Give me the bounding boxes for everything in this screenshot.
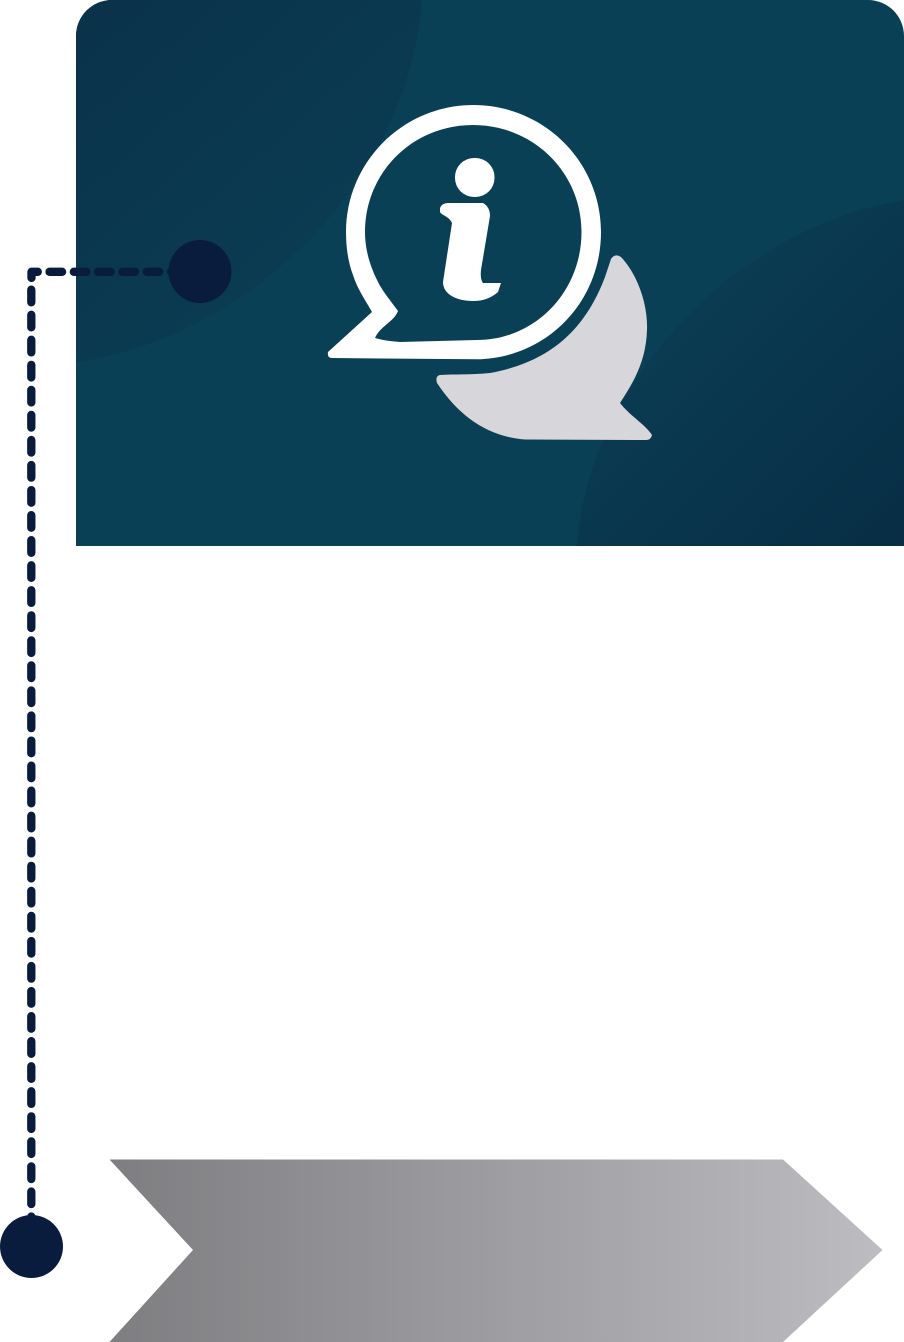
letter i dot bbox=[455, 158, 494, 197]
marker: top node bbox=[168, 240, 232, 303]
icon: white information speech bubble bbox=[328, 105, 601, 359]
marker: bottom node bbox=[0, 1215, 63, 1278]
connector: dashed line bbox=[31, 272, 172, 1222]
icon: grey speech bubble bbox=[436, 255, 652, 440]
bubble outline bbox=[328, 105, 601, 359]
panel: teal header bbox=[76, 0, 904, 546]
letter i stem bbox=[440, 203, 501, 301]
arrow: grey gradient banner bbox=[110, 1160, 882, 1342]
